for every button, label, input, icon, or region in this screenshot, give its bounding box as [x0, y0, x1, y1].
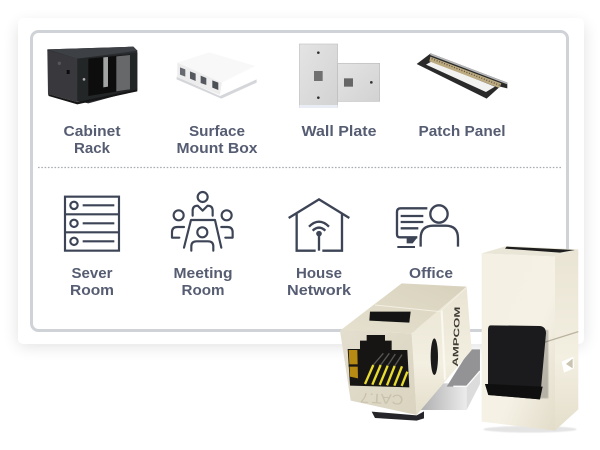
product: cabinet rack [47, 47, 137, 104]
icon: server room [65, 197, 119, 251]
label: Surface Mount Box: Mount Box [176, 141, 258, 157]
product: surface mount box [177, 52, 257, 99]
panel: application card [18, 18, 584, 346]
label: Cabinet Rack: Rack [74, 141, 111, 157]
product: silver base block [372, 349, 480, 421]
label: Meeting Room: Meeting [174, 266, 232, 282]
label: House Network [287, 266, 352, 299]
label: Sever Room [70, 266, 114, 299]
icon: house network [289, 199, 349, 251]
product: white coupler, port view [340, 283, 472, 415]
label: Cabinet Rack: Cabinet [64, 124, 121, 140]
label: Cabinet Rack [64, 124, 121, 157]
label: Meeting Room [174, 266, 232, 299]
embossed mark: CAT.7: CAT.7 [359, 390, 404, 408]
label: House Network: Network [287, 283, 352, 299]
label: Sever Room: Sever [72, 266, 113, 282]
label: Meeting Room: Room [182, 283, 224, 299]
label: Surface Mount Box [176, 124, 258, 157]
product: white coupler, latch view [482, 246, 578, 433]
label: House Network: House [296, 266, 342, 282]
label: Wall Plate: Wall Plate [302, 124, 376, 140]
icon: meeting room [172, 192, 233, 251]
label: Sever Room: Room [70, 283, 114, 299]
product: patch panel [417, 53, 507, 99]
label: Surface Mount Box: Surface [189, 124, 245, 140]
label: Patch Panel: Patch Panel [418, 124, 506, 140]
brand mark on side: AMPCOM [451, 306, 462, 367]
label: Office: Office [409, 266, 453, 282]
product: wall plates [299, 44, 380, 108]
icon: office [397, 205, 458, 247]
